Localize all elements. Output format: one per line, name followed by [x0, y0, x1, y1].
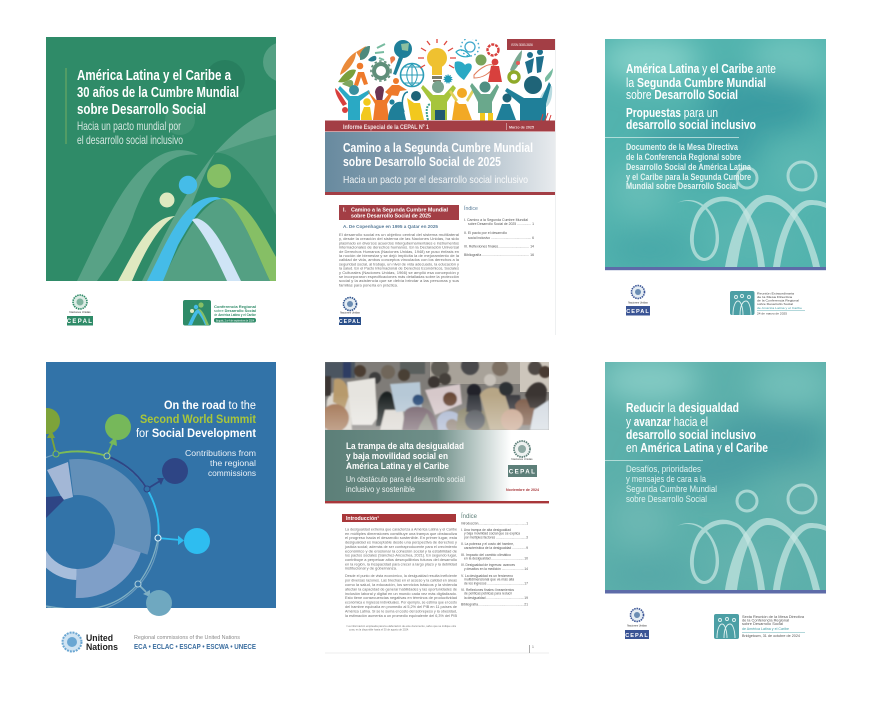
logo: Conferencia Regional sobre Desarrollo Social: Bogotá, 2 a 4 de septiembre de 2024	[216, 319, 254, 323]
body text: los pactos sociales (Sánchez-Ancochea, 2021). En segundo lugar,	[345, 553, 457, 558]
logo: Naciones Unidas and CEPAL	[625, 608, 649, 639]
cover title: Propuestas para un	[626, 106, 718, 120]
table of contents: Introducción......................................................1	[461, 522, 528, 526]
body text: como la salud, la educación, los servicios básicos y la vivienda	[345, 582, 458, 587]
table of contents: la desigualdad .........................................19	[464, 596, 528, 600]
photo: street crowd	[325, 362, 549, 430]
body text: plasmado en diversos acuerdos intergubernamentales e instrumentos	[339, 240, 459, 245]
cover subtitle: Desafíos, prioridades	[626, 464, 701, 475]
body text: Esto tiene consecuencias negativas en términos de productividad	[345, 595, 457, 600]
body text: seguridad social, al trabajo, un nivel de vida adecuado, la educación y	[339, 261, 459, 266]
cover title: Second World Summit	[140, 414, 256, 426]
publication date: Noviembre de 2024	[506, 487, 540, 492]
table of contents: de políticas públicas para reducir	[464, 592, 513, 596]
logo: Naciones Unidas and CEPAL	[626, 286, 650, 316]
cover title: Hacia un pacto mundial por	[77, 119, 181, 133]
body text: la estimación aumenta a un promedio equivalente del 6,3% del PIB	[345, 613, 457, 618]
logo: Naciones Unidas and CEPAL: CEPAL	[509, 468, 536, 476]
logo: Reunión Extraordinaria: 24 de marzo de 2025	[757, 312, 787, 316]
body text: y, desde la creación del sistema de las Naciones Unidas, ha sido	[339, 236, 460, 241]
body text: económico y de erosionar la cohesión social y la estabilidad de	[345, 548, 458, 553]
watercolor background	[600, 358, 830, 595]
body text: institucional y de gobernanza.	[345, 566, 397, 571]
table of contents: sobre Desarrollo Social de 2025 ............... 1	[468, 222, 534, 226]
section heading: sobre Desarrollo Social de 2025	[351, 214, 431, 220]
logo: Naciones Unidas and CEPAL: Naciones Unidas	[511, 457, 533, 461]
body text: desigualdad es inaceptable desde una perspectiva de derechos y	[345, 540, 457, 545]
purple bar	[605, 590, 826, 594]
red report band: Marzo de 2025	[509, 126, 534, 130]
section heading	[339, 205, 459, 220]
red report band	[325, 120, 555, 132]
cover title: 30 años de la Cumbre Mundial	[77, 85, 239, 101]
logo: Naciones Unidas and CEPAL: CEPAL	[626, 309, 650, 315]
body text: Desde el punto de vista económico, la desigualdad resulta ineficiente	[345, 573, 458, 578]
cover title: Reducir la desigualdad	[626, 401, 739, 415]
regional commissions: Regional commissions of the United Nations	[134, 635, 240, 641]
cover subtitle: Segunda Cumbre Mundial	[626, 484, 717, 495]
cover title	[136, 400, 256, 440]
cover title: sobre Desarrollo Social	[626, 88, 738, 102]
body text: por diversas razones. Las brechas en el acceso y la calidad en áreas	[345, 577, 457, 582]
green cover background	[46, 37, 276, 281]
logo: Naciones Unidas and CEPAL	[508, 441, 537, 477]
body text: internacionales de derechos humanos. En la Declaración Universal	[339, 245, 459, 250]
cover title: la Segunda Cumbre Mundial	[626, 76, 766, 90]
table of contents: III. Reflexiones finales................................ 14	[464, 244, 534, 248]
logo: Sexta Reunión de la Mesa Directiva: de la Conferencia Regional	[742, 618, 789, 622]
table of contents: II. La pobreza y el costo del hambre,	[461, 542, 514, 546]
radial donut diagram	[46, 408, 210, 616]
cover title	[77, 68, 239, 147]
table of contents: Bibliografía ................................................. 16	[464, 253, 534, 257]
panel: cover Reducir la desigualdad	[600, 358, 830, 639]
body text: de Derechos Humanos (Naciones Unidas, 1948) se puso énfasis en	[339, 249, 459, 254]
table of contents: por múltiples factores .................................3	[464, 536, 528, 540]
logo: Conferencia Regional sobre Desarrollo Social: sobre Desarrollo Social	[214, 309, 256, 313]
body text: económica e ingresos individuales. Por ejemplo, se estima que el costo	[345, 600, 458, 605]
cover subtitle: the regional	[210, 459, 256, 468]
body text: la salud. En el Pacto Internacional de Derechos Económicos, Sociales	[339, 266, 459, 271]
vertical accent rule	[66, 68, 67, 144]
watercolor background	[600, 35, 830, 270]
cover title: sobre Desarrollo Social	[77, 102, 206, 118]
title block	[325, 132, 555, 195]
logo: Reunión Extraordinaria: de la Mesa Directiva	[757, 295, 792, 299]
cover subtitle: Mundial sobre Desarrollo Social	[626, 181, 738, 192]
body text: La desigualdad extrema que caracteriza a América Latina y el Caribe	[345, 526, 458, 532]
logo: United Nations: United	[86, 633, 113, 643]
body text: afectan la capacidad de generar habilidades y las oportunidades de	[345, 586, 458, 591]
table of contents: II. El pacto por el desarrollo	[464, 231, 507, 235]
table of contents: en la desigualdad ...................................10	[464, 556, 528, 560]
table of contents	[464, 205, 534, 257]
cover title: América Latina y el Caribe ante	[626, 62, 776, 76]
table of contents: I. Camino a la Segunda Cumbre Mundial	[464, 218, 528, 222]
logo: Sexta Reunión de la Mesa Directiva: Bridgetown, 31 de octubre de 2024	[742, 634, 800, 638]
cover title: desarrollo social inclusivo	[626, 118, 756, 132]
logo: Naciones Unidas and CEPAL: Naciones Unidas	[628, 300, 649, 304]
page footer: 1	[532, 645, 534, 649]
body text: del hambre equivalía en promedio al 5,2% del PIB en 11 países de	[345, 604, 458, 609]
cover subtitle: Contributions from	[185, 449, 256, 458]
cover title	[626, 62, 776, 132]
cover subtitle: commissions	[208, 469, 256, 478]
table of contents: y desafíos en la medición .........................14	[464, 567, 528, 571]
logo: Conferencia Regional sobre Desarrollo Social	[183, 300, 256, 326]
table of contents: de los ingresos ........................................17	[464, 582, 528, 586]
cover title: el desarrollo social inclusivo	[77, 133, 183, 147]
title block: Un obstáculo para el desarrollo social	[346, 474, 465, 484]
blue cover background	[46, 362, 276, 608]
logo: Naciones Unidas and CEPAL: CEPAL	[67, 319, 93, 325]
table of contents: I. Una trampa de alta desigualdad	[461, 528, 511, 532]
panel: informe especial Camino a la Segunda Cumbre Mundial	[325, 38, 556, 335]
table of contents: IV. Desigualdad de ingresos: avances	[461, 563, 515, 567]
logo: Naciones Unidas and CEPAL: CEPAL	[625, 633, 649, 639]
purple bar	[605, 267, 826, 270]
footnote: cosa, es la disponible hasta el 30 de agosto de 2024.	[349, 628, 409, 632]
cover title	[626, 401, 768, 455]
cover title: On the road to the	[164, 400, 256, 412]
logo: Reunión Extraordinaria	[730, 291, 805, 316]
table of contents: Índice	[461, 513, 478, 520]
cover title: América Latina y el Caribe a	[77, 68, 232, 84]
body text: calidad de vida, ambos conceptos vinculados con los derechos a la	[339, 257, 460, 262]
panel: cover On the road to the Second World Summit	[46, 362, 276, 652]
cover title: desarrollo social inclusivo	[626, 428, 756, 442]
logo: Naciones Unidas and CEPAL: CEPAL	[339, 319, 361, 325]
title block: sobre Desarrollo Social de 2025	[343, 155, 501, 169]
body text: justicia social; además de ser contraproducente para el crecimiento	[344, 544, 458, 549]
cover title: en América Latina y el Caribe	[626, 441, 768, 455]
body text: inclusión laboral y digital en un mundo cada vez más digitalizado.	[345, 591, 457, 596]
page edge	[555, 39, 556, 335]
logo: United Nations	[62, 632, 118, 652]
table of contents: III. Impacto del cambio climático	[461, 553, 511, 557]
red report band: Informe Especial de la CEPAL Nº 1	[343, 125, 430, 131]
table of contents: V. La desigualdad es un fenómeno	[461, 574, 513, 578]
logo: Naciones Unidas and CEPAL: Naciones Unidas	[627, 624, 648, 628]
regional commissions: ECA • ECLAC • ESCAP • ESCWA • UNECE	[134, 644, 256, 651]
logo: Naciones Unidas and CEPAL: Naciones Unidas	[340, 310, 361, 314]
body text	[339, 232, 460, 287]
body text	[344, 526, 458, 618]
logo: Conferencia Regional sobre Desarrollo Social: de América Latina y el Caribe	[214, 313, 256, 317]
logo: Sexta Reunión de la Mesa Directiva	[714, 614, 805, 639]
cover title: for Social Development	[136, 428, 256, 440]
table of contents: VI. Reflexiones finales: lineamientos	[461, 588, 514, 592]
logo: Sexta Reunión de la Mesa Directiva: sobre Desarrollo Social	[742, 622, 783, 626]
regional commissions	[134, 635, 256, 651]
panel: cover América Latina y el Caribe ante la Segunda Cumbre	[600, 35, 830, 316]
ISSN tab	[507, 39, 555, 50]
cover subtitle	[605, 137, 752, 192]
logo: Conferencia Regional sobre Desarrollo Social: Conferencia Regional	[214, 305, 256, 309]
title block: y baja movilidad social en	[346, 451, 448, 462]
logo: Reunión Extraordinaria: sobre Desarrollo Social	[757, 302, 793, 306]
panel: cover América Latina y el Caribe a 30 años	[46, 37, 276, 326]
logo: Reunión Extraordinaria: Reunión Extraordinaria	[757, 292, 794, 296]
cover subtitle: sobre Desarrollo Social	[626, 494, 707, 505]
body text: contribuye a perpetuar altos desequilibrios futuros del desarrollo	[345, 557, 458, 562]
body text: el progreso hacia el desarrollo sostenible. En primer lugar, esta	[345, 535, 458, 540]
cover subtitle: de la Conferencia Regional sobre	[626, 152, 741, 163]
abstract swooshes and figures	[77, 43, 276, 281]
title block: Camino a la Segunda Cumbre Mundial	[343, 141, 533, 155]
table of contents	[461, 513, 528, 606]
cover subtitle: y mensajes de cara a la	[626, 474, 707, 485]
logo: Naciones Unidas and CEPAL: Naciones Unidas	[69, 310, 91, 314]
logo: Naciones Unidas and CEPAL	[67, 295, 93, 326]
body text: la noción de bienestar y se dejó implícita la de mejoramiento de la	[339, 253, 460, 258]
table of contents: y baja movilidad social que se explica	[464, 532, 520, 536]
logo: Sexta Reunión de la Mesa Directiva: Sexta Reunión de la Mesa Directiva	[742, 615, 804, 619]
footnote: ¹ La información empleada para la elaboración de este documento, salvo que se indique otra	[346, 624, 456, 628]
cover subtitle	[605, 460, 717, 505]
logo: Reunión Extraordinaria: de América Latina y el Caribe	[757, 306, 802, 310]
body text: y Culturales (Naciones Unidas, 1966) se amplió esa concepción y	[339, 270, 459, 275]
body text: El desarrollo social es un objetivo central del sistema multilateral	[339, 232, 459, 237]
footnote	[346, 624, 456, 632]
logo: Sexta Reunión de la Mesa Directiva: de América Latina y el Caribe	[742, 627, 789, 631]
body text: familias para ponerla en práctica.	[339, 282, 398, 287]
cover subtitle: y el Caribe para la Segunda Cumbre	[626, 172, 751, 183]
title block	[325, 430, 549, 503]
title block: La trampa de alta desigualdad	[346, 441, 464, 452]
abstract rings and arches	[677, 162, 826, 267]
body text: social y la asistencia que se debía brindar a las personas y sus	[339, 278, 459, 283]
panel: informe La trampa de alta desigualdad	[321, 357, 551, 654]
section heading: Introducción¹	[346, 515, 379, 522]
body text: América Latina. Si se le suma el costo del sobrepeso y la obesidad,	[345, 609, 457, 614]
section heading: I.	[343, 208, 346, 214]
title block: inclusivo y sostenible	[346, 484, 415, 494]
logo: Reunión Extraordinaria: de la Conferencia Regional	[757, 298, 799, 302]
subheading: A. De Copenhague en 1995 a Qatar en 2025	[343, 224, 438, 230]
body text: se incorporaron especificaciones más detalladas sobre la protección	[339, 274, 459, 279]
logo: United Nations: Nations	[86, 642, 118, 652]
cover subtitle: Desarrollo Social de América Latina	[626, 162, 752, 173]
table of contents: Bibliografía.................................................21	[461, 602, 528, 606]
body text: en múltiples dimensiones constituye una trampa que obstaculiza	[345, 531, 458, 536]
table of contents: Índice	[464, 205, 478, 212]
cover subtitle: Documento de la Mesa Directiva	[626, 142, 739, 153]
title block: Hacia un pacto por el desarrollo social inclusivo	[343, 174, 528, 186]
logo: Naciones Unidas and CEPAL	[339, 298, 361, 325]
cover title: y avanzar hacia el	[626, 415, 708, 429]
section heading	[342, 514, 456, 522]
cover subtitle	[185, 449, 256, 478]
body text: en la región, la incapacidad para crecer a largo plazo y la debilidad	[345, 561, 457, 566]
section heading: Camino a la Segunda Cumbre Mundial	[351, 208, 449, 214]
table of contents: social inclusivo ............................................ 6	[468, 236, 534, 240]
illustration: people, plants, light bulb and globe	[335, 38, 553, 121]
ISSN tab: ISSN 3085-3636	[511, 43, 533, 47]
table of contents: característica de la desigualdad ...............9	[464, 546, 528, 550]
title block: América Latina y el Caribe	[346, 461, 449, 472]
table of contents: multidimensional que va más allá	[464, 578, 514, 582]
abstract rings and arches	[677, 485, 826, 590]
